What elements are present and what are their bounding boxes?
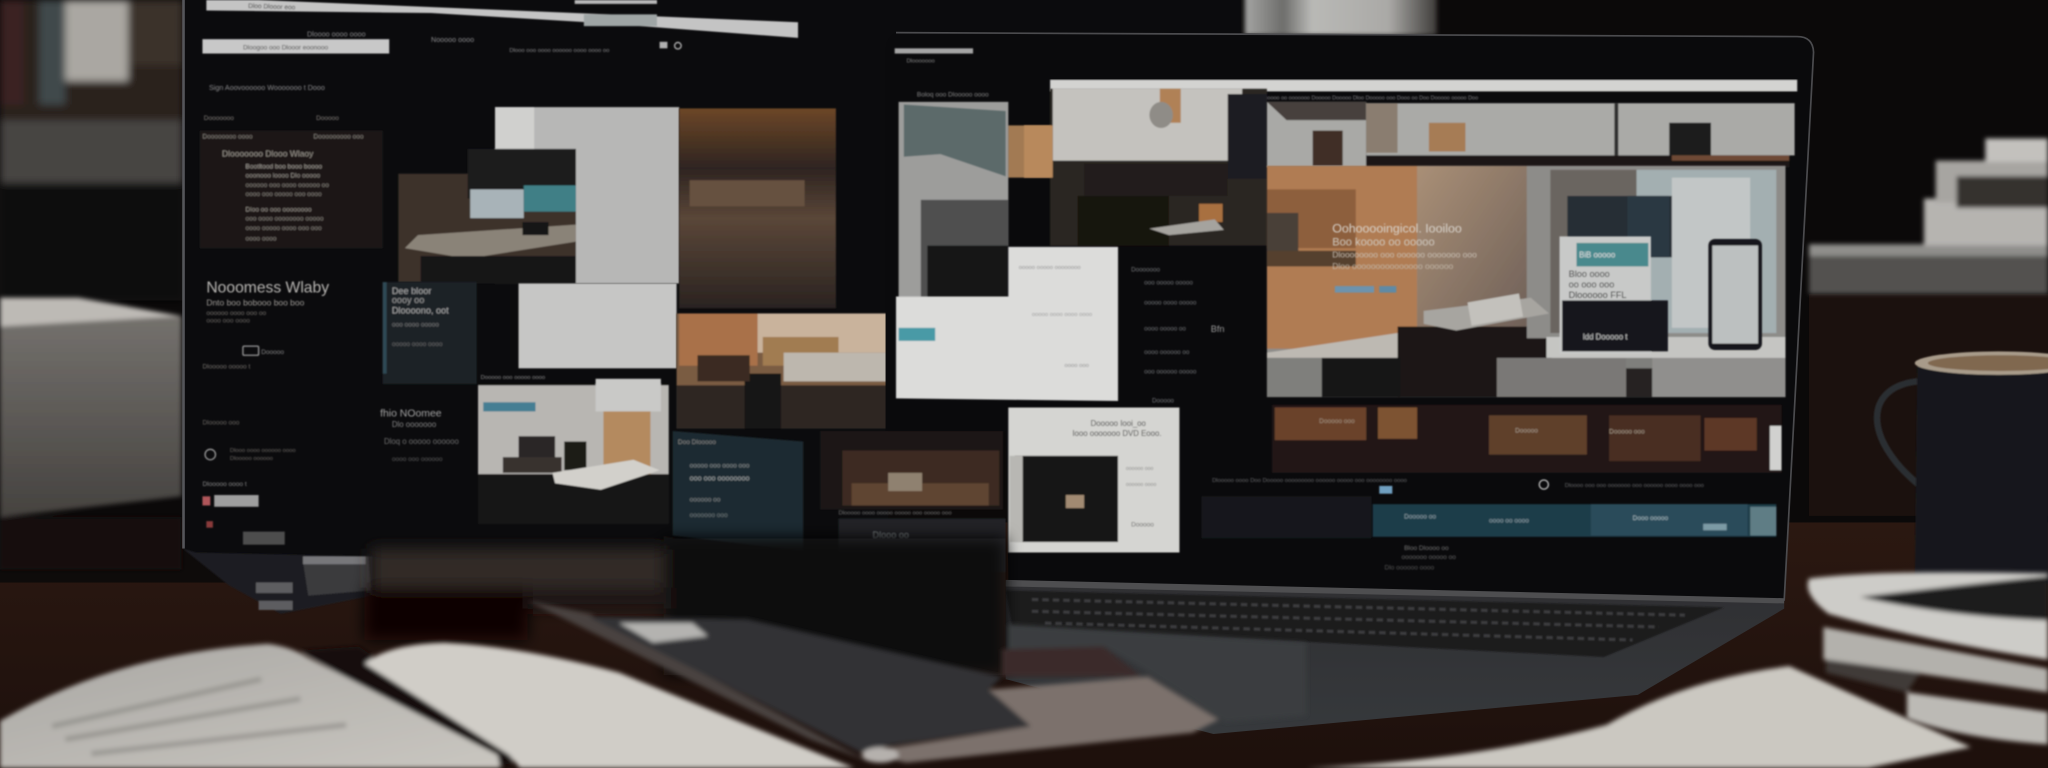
laptop blue strip bbox=[1202, 496, 1776, 571]
monitor blue-tinted card: ooooo ooo oooo ooo bbox=[690, 463, 750, 470]
hero overlay text: Oohooooingicol. Iooiloo bbox=[1332, 221, 1462, 235]
laptop top photo strip bbox=[1267, 102, 1795, 167]
laptop bottom text strip: Dlooooo oooo Doo Dooooo ooooooooo oooooo ooooo ooo oooooooo oooo bbox=[1212, 478, 1408, 484]
monitor blue-tinted card bbox=[673, 431, 803, 551]
monitor dark text card: Dloq o ooooo oooooo bbox=[384, 437, 460, 446]
laptop white article panel: oooooo ooo bbox=[1126, 466, 1154, 472]
laptop side text list bbox=[1131, 267, 1224, 404]
monitor dark text card: fhio NOomee bbox=[380, 409, 442, 420]
monitor foot with keys bbox=[183, 549, 372, 614]
hero overlay text: Dloo ooooooooooooooo oooooo bbox=[1332, 261, 1454, 271]
monitor browser bar bbox=[202, 0, 798, 54]
laptop white document panel: ooooo ooooo oooooooo bbox=[1019, 265, 1081, 271]
monitor headline: Nooomess Wlaby: Dlooooo ooooo t bbox=[202, 363, 250, 370]
monitor dark text card: oooy oo bbox=[392, 295, 424, 305]
article thumbnail bbox=[1015, 456, 1118, 542]
book shadow bbox=[300, 647, 517, 768]
monitor browser bar: Dloogoo ooo Dlooor eoonooo bbox=[243, 45, 328, 52]
hero overlay text: Boo koooo oo ooooo bbox=[1332, 237, 1435, 249]
hero display cards and phone: BiB ooooo bbox=[1579, 250, 1616, 259]
monitor left column text: oooo ooooo oooo ooo ooo bbox=[246, 225, 322, 232]
laptop lower dusk photos: Dooooo ooo bbox=[1319, 418, 1355, 425]
laptop lower dusk photos: Dooooo ooo bbox=[1609, 429, 1645, 436]
laptop top white bar bbox=[1050, 80, 1797, 91]
laptop lower dusk photos bbox=[1272, 405, 1782, 473]
tablet screen bbox=[588, 616, 1031, 752]
hero overlay text: Dloooooooo ooo oooooo ooooooo ooo bbox=[1332, 249, 1477, 259]
laptop lid bbox=[886, 31, 1814, 603]
mug handle bbox=[1877, 381, 1920, 486]
monitor dark text card: ooo oooo ooooo bbox=[392, 322, 439, 329]
laptop small window header bbox=[895, 48, 989, 99]
monitor headline: Nooomess Wlaby: Dlooooo ooo bbox=[202, 419, 240, 426]
laptop white article panel: oooooo oooo bbox=[1126, 482, 1156, 488]
monitor nav text: Sign Aoovoooooo Wooooooo t Dooo bbox=[209, 84, 325, 92]
monitor left column text: oooooo ooo oooo oooooo oo bbox=[246, 182, 329, 189]
monitor left column text: oooo ooo ooooo ooo oooo bbox=[246, 191, 322, 198]
right page bbox=[364, 643, 854, 768]
monitor left column text: Dooooo bbox=[316, 115, 339, 122]
monitor brown panel bbox=[679, 108, 836, 308]
monitor dusk photo cards: Dlooo oo bbox=[872, 530, 909, 540]
monitor left column text: Dooooooo bbox=[204, 115, 234, 122]
monitor nav text: Dloooo oooo oooo bbox=[307, 31, 366, 39]
right shelf with books bbox=[1809, 138, 2048, 294]
laptop keyboard bbox=[1006, 590, 1724, 657]
monitor body bbox=[183, 0, 1241, 594]
monitor left column text: ooo oooo oooooooo ooooo bbox=[246, 216, 324, 223]
monitor dark text card: ooooo oooo oooo bbox=[392, 341, 443, 348]
monitor dusk photo cards bbox=[820, 431, 1006, 572]
laptop bottom text strip bbox=[1212, 478, 1705, 494]
laptop white article panel: Iooo ooooooo DVD Eooo. bbox=[1072, 429, 1162, 438]
monitor room photo: Dooooo ooo ooooo oooo bbox=[481, 375, 546, 381]
white box stack on left bbox=[0, 298, 182, 569]
tablet glare bbox=[619, 623, 708, 643]
monitor dark text card: oooo ooo oooooo bbox=[392, 456, 443, 463]
laptop hinge bbox=[1006, 580, 1784, 603]
laptop blue strip: Dooooo oo bbox=[1404, 514, 1436, 521]
monitor left column text: oooo oooo bbox=[246, 235, 277, 242]
laptop blue strip: oooo oo oooo bbox=[1489, 517, 1529, 524]
teal button bbox=[899, 328, 935, 341]
laptop side text list: oooo ooooo oo bbox=[1144, 325, 1186, 332]
laptop deck bbox=[1006, 583, 1784, 734]
left bookshelf bbox=[0, 0, 183, 300]
monitor dark text card: Dee bloor bbox=[392, 286, 431, 296]
monitor headline: Nooomess Wlaby: oooooo oooo ooo oo bbox=[206, 310, 267, 317]
monitor headline: Nooomess Wlaby: Nooomess Wlaby bbox=[206, 280, 329, 297]
monitor headline: Nooomess Wlaby bbox=[202, 280, 329, 545]
laptop office photo bbox=[1024, 89, 1267, 246]
laptop white document panel bbox=[896, 247, 1118, 401]
monitor left column text: Doooooooo oooo bbox=[202, 133, 253, 140]
laptop blue strip: Dlo oooooo oooo bbox=[1384, 564, 1435, 571]
laptop side text list: ooo oooooo ooooo bbox=[1144, 369, 1197, 376]
window light behind laptop bbox=[1245, 0, 1437, 35]
coffee mug bbox=[1877, 351, 2048, 584]
monitor nav text: Dlooo ooo oooo oooooo oooo oooo oo bbox=[509, 48, 610, 54]
monitor left column text bbox=[200, 115, 383, 248]
hero orange wall bbox=[1267, 166, 1417, 349]
monitor headline: Nooomess Wlaby: Dlooo oooo oooooo oooo bbox=[230, 448, 296, 454]
hero display cards and phone: Bloo oooo bbox=[1569, 269, 1610, 279]
monitor dark text card: Dlo ooooooo bbox=[392, 420, 437, 429]
left page bbox=[0, 644, 500, 768]
monitor left column text: Dlooooooo Dlooo Wlaoy bbox=[222, 149, 314, 159]
tablet edge bbox=[528, 601, 869, 761]
monitor left column text: Dloo oo ooo oooooooo bbox=[246, 207, 312, 214]
blurred foreground tablet bbox=[528, 601, 1306, 763]
laptop blue strip: Dooo ooooo bbox=[1633, 515, 1669, 522]
monitor second white panel bbox=[519, 283, 677, 368]
laptop bottom text strip: Dloooo ooo ooo ooooooo ooo oooooo oooo oooo ooo bbox=[1565, 483, 1705, 489]
blurred foreground dark object bbox=[364, 538, 1006, 675]
monitor blue-tinted card: Doo Dlooooo bbox=[678, 439, 716, 446]
monitor dark text card bbox=[380, 282, 477, 463]
tablet brown corner bbox=[1002, 647, 1142, 677]
monitor browser bar: Dloo Dlooor eoo bbox=[248, 3, 296, 11]
left monitor bbox=[182, 0, 1241, 614]
laptop white article panel: Dooooo Iooi_oo bbox=[1091, 419, 1147, 428]
hero overlay text bbox=[1332, 221, 1477, 293]
laptop left gray photo bbox=[899, 102, 1053, 298]
hero display cards and phone: oo ooo ooo bbox=[1569, 279, 1614, 289]
laptop hero photo bbox=[1267, 166, 1785, 397]
monitor blue-tinted card: ooooooo ooo bbox=[690, 512, 728, 519]
laptop blue strip: Bloo Dloooo oo bbox=[1404, 545, 1449, 552]
open book left bbox=[0, 643, 854, 768]
monitor left column text: ooonooo loooo Dlo ooooo bbox=[246, 173, 321, 180]
monitor left column text: Dooooooooo ooo bbox=[313, 133, 364, 140]
monitor warm office photo bbox=[677, 313, 891, 428]
monitor dusk photo cards: Dlooooo oooo ooooo ooooo ooo ooooo ooo bbox=[839, 511, 952, 517]
laptop side text list: oooo oooooo oo bbox=[1144, 349, 1190, 356]
monitor nav text: Nooooo oooo bbox=[431, 36, 474, 44]
monitor nav text bbox=[209, 31, 681, 92]
laptop bbox=[886, 31, 1814, 734]
laptop white article panel bbox=[1008, 408, 1179, 552]
monitor headline: Nooomess Wlaby: Dlooooo oooo t bbox=[202, 481, 247, 488]
laptop side text list: ooo ooooo ooooo bbox=[1144, 280, 1193, 287]
phone and book stack right bbox=[1808, 572, 2048, 744]
deck sheen bbox=[1008, 624, 1306, 722]
hero display cards and phone: ldd Dooooo t bbox=[1583, 333, 1628, 342]
laptop white document panel: oooo ooo bbox=[1064, 363, 1090, 369]
monitor white panel with desk photo bbox=[398, 107, 679, 283]
laptop side text list: Bfn bbox=[1211, 324, 1224, 334]
hero display cards and phone: Dloooooo FFL bbox=[1569, 290, 1626, 300]
monitor blue-tinted card: ooo ooo oooooooo bbox=[690, 475, 749, 483]
monitor dark text card: Dloooono, oot bbox=[392, 305, 449, 315]
laptop side text list: Dooooooo bbox=[1131, 267, 1160, 274]
monitor blue-tinted card: oooooo oo bbox=[690, 497, 721, 504]
laptop lower dusk photos: Dooooo bbox=[1515, 427, 1538, 434]
laptop side text list: Dooooo bbox=[1152, 397, 1174, 404]
open book right foreground bbox=[1306, 666, 1971, 768]
laptop white document panel: ooooo oooo oooo oooo bbox=[1032, 312, 1093, 318]
laptop small window header: Boloq ooo Dlooooo oooo bbox=[917, 92, 989, 99]
laptop side text list: ooooo oooo ooooo bbox=[1144, 299, 1197, 306]
monitor headline: Nooomess Wlaby: Dnto boo bobooo boo boo bbox=[206, 298, 305, 308]
laptop blue strip: ooooooo ooooo oo bbox=[1401, 554, 1456, 561]
monitor left column text: Bootltood boo booo boooo bbox=[246, 163, 322, 170]
monitor room photo bbox=[478, 375, 669, 524]
tablet tan rim bbox=[861, 677, 1219, 763]
hero display cards and phone bbox=[1560, 236, 1762, 354]
laptop small window header: Dlooooooo bbox=[906, 59, 936, 65]
monitor headline: Nooomess Wlaby: Dlooooo oooooo bbox=[230, 456, 274, 462]
hero gray wall bbox=[1527, 166, 1785, 338]
monitor headline: Nooomess Wlaby: Dooooo bbox=[261, 349, 284, 356]
monitor headline: Nooomess Wlaby: oooo ooo oooo bbox=[206, 318, 250, 325]
laptop white article panel: Dooooo bbox=[1131, 521, 1154, 528]
laptop nav text: Dooooo oo ooooooo Dooooo Dooooo Dloo Dooooo ooo Dooo oo Doo Dooooo ooooo Doo bbox=[1260, 95, 1478, 101]
